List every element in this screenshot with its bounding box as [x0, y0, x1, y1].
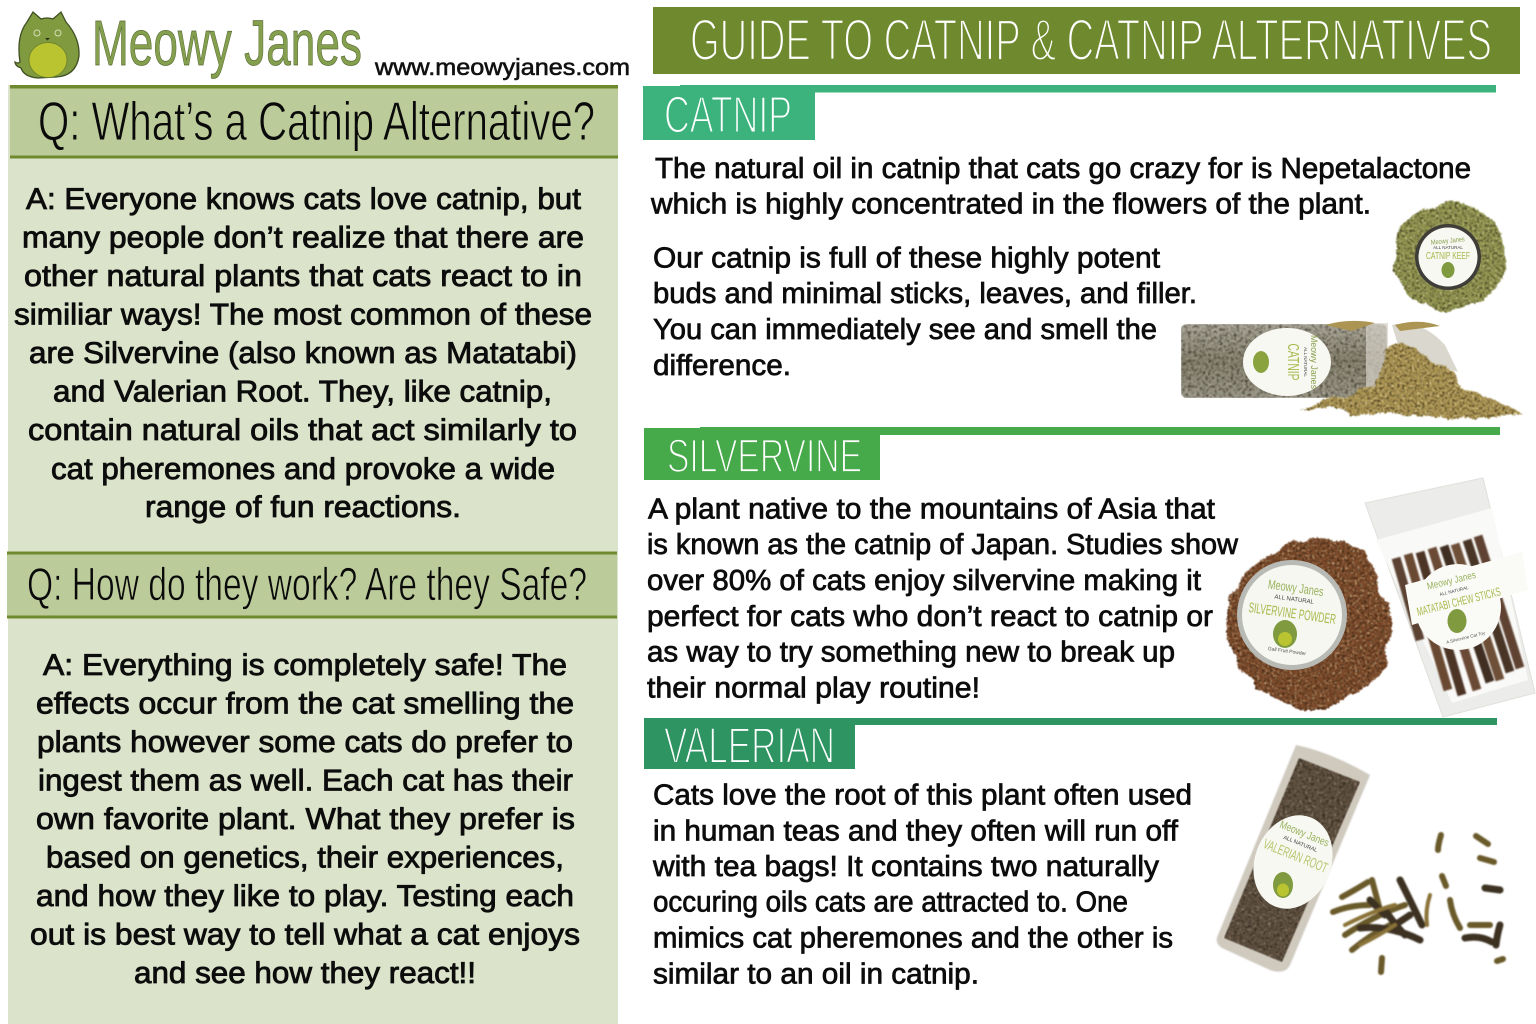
text block: first answer: many people don’t realize that there are — [22, 222, 584, 254]
text block: valerian description: occuring oils cats are attracted to. One — [653, 886, 1128, 918]
product: catnip tube and spilled buds — [1181, 321, 1525, 418]
panel: Q and A background — [8, 85, 618, 1024]
text block: silvervine description: is known as the catnip of Japan. Studies show — [647, 529, 1239, 561]
text block: first answer — [14, 183, 592, 524]
text block: silvervine description: A plant native to the mountains of Asia that — [648, 494, 1215, 526]
text block: first answer: other natural plants that cats react to in — [24, 260, 582, 293]
product: valerian root tube: Meowy Janes — [1278, 819, 1331, 850]
section heading: catnip — [643, 85, 1496, 144]
website url: www.meowyjanes.com — [374, 54, 630, 80]
text block: first answer: are Silvervine (also known as Matatabi) — [29, 337, 577, 370]
product: matatabi chew sticks pack — [1365, 478, 1535, 717]
text block: valerian description: mimics cat pheremones and the other is — [653, 922, 1173, 954]
text block: valerian description: with tea bags! It contains two naturally — [652, 851, 1160, 883]
text block: silvervine description: their normal play routine! — [647, 672, 980, 704]
text block: first answer: range of fun reactions. — [145, 491, 461, 524]
heading band: How do they work — [7, 552, 617, 618]
text block: first answer: and Valerian Root. They, like catnip, — [53, 376, 552, 408]
product: scattered valerian roots — [1333, 835, 1503, 972]
text block: catnip description: difference. — [653, 350, 791, 382]
text block: second answer: and how they like to play. Testing each — [36, 880, 574, 913]
product: catnip tube and spilled buds: Meowy Janes — [1308, 335, 1319, 389]
logo wordmark: Meowy Janes: Meowy Janes — [92, 7, 362, 79]
text block: catnip oil: which is highly concentrated in the flowers of the plant. — [650, 188, 1371, 220]
product: silvervine powder tin: SILVERVINE POWDER — [1248, 599, 1337, 627]
product: matatabi chew sticks pack: A Silvervine Cat Toy — [1446, 630, 1486, 645]
text block: catnip description — [653, 242, 1197, 382]
text block: second answer: plants however some cats do prefer to — [37, 726, 573, 759]
heading band: What's a Catnip Alternative: Q: What’s a Catnip Alternative? — [38, 90, 595, 152]
section heading: valerian — [644, 717, 1497, 774]
text block: valerian description: Cats love the root of this plant often used — [653, 780, 1192, 812]
product: valerian root tube — [1217, 745, 1370, 972]
product: valerian root tube: VALERIAN ROOT — [1261, 835, 1330, 876]
text block: catnip oil: The natural oil in catnip that cats go crazy for is Nepetalactone — [655, 153, 1471, 185]
product: matatabi chew sticks pack: Meowy Janes — [1426, 570, 1477, 593]
product: catnip keef tin: ALL NATURAL — [1433, 245, 1463, 250]
text block: first answer: similiar ways! The most common of these — [14, 298, 592, 332]
text block: catnip description: You can immediately see and smell the — [653, 314, 1157, 346]
section heading: catnip: CATNIP — [664, 86, 792, 144]
product: silvervine powder tin: Meowy Janes — [1267, 576, 1325, 599]
text block: catnip description: buds and minimal sticks, leaves, and filler. — [653, 278, 1197, 310]
product: silvervine powder tin — [1227, 537, 1390, 708]
text block: second answer: ingest them as well. Each cat has their — [38, 764, 573, 798]
text block: second answer: based on genetics, their experiences, — [46, 842, 564, 874]
text block: first answer: A: Everyone knows cats love catnip, but — [26, 183, 582, 216]
text block: valerian description — [652, 780, 1192, 990]
section heading: silvervine: SILVERVINE — [667, 429, 862, 482]
text block: silvervine description: as way to try something new to break up — [647, 636, 1175, 668]
product: catnip keef tin — [1394, 203, 1506, 311]
section heading: valerian: VALERIAN — [664, 717, 835, 774]
text block: valerian description: in human teas and they often will run off — [653, 816, 1179, 848]
text block: second answer: out is best way to tell what a cat enjoys — [30, 918, 580, 952]
logo: cat mascot — [15, 12, 79, 78]
text block: catnip oil — [650, 153, 1471, 220]
text block: silvervine description: over 80% of cats enjoy silvervine making it — [647, 565, 1201, 597]
product: silvervine powder tin: ALL NATURAL — [1274, 594, 1315, 606]
text block: second answer: effects occur from the cat smelling the — [36, 688, 574, 720]
product: catnip tube and spilled buds: ALL NATURAL — [1303, 347, 1308, 377]
product: valerian root tube: ALL NATURAL — [1282, 835, 1318, 854]
product: catnip keef tin: Meowy Janes — [1431, 236, 1466, 247]
text block: catnip description: Our catnip is full of these highly potent — [653, 242, 1160, 274]
text block: first answer: cat pheremones and provoke a wide — [51, 453, 555, 486]
text block: valerian description: similar to an oil in catnip. — [653, 958, 979, 990]
heading band: How do they work: Q: How do they work? Are they Safe? — [27, 558, 587, 610]
text block: silvervine description: perfect for cats who don’t react to catnip or — [647, 601, 1213, 633]
product: catnip keef tin: CATNIP KEEF — [1426, 251, 1470, 262]
text block: second answer: own favorite plant. What they prefer is — [36, 803, 575, 836]
text block: silvervine description — [647, 494, 1239, 704]
heading band: What's a Catnip Alternative — [10, 85, 618, 158]
section heading: silvervine — [644, 427, 1500, 482]
text block: second answer: and see how they react!! — [134, 957, 476, 990]
text block: second answer — [30, 649, 580, 990]
product: catnip tube and spilled buds: CATNIP — [1284, 344, 1301, 380]
product: matatabi chew sticks pack: ALL NATURAL — [1439, 585, 1470, 597]
text block: second answer: A: Everything is completely safe! The — [43, 649, 567, 682]
product: silvervine powder tin: Gall Fruit Powder — [1267, 646, 1307, 657]
text block: first answer: contain natural oils that act similarly to — [28, 414, 577, 447]
